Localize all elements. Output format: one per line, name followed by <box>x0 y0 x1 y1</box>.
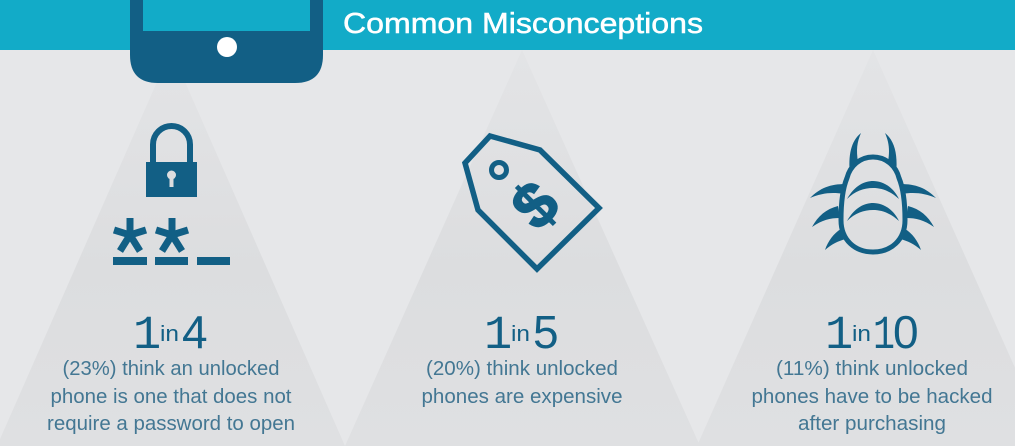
icon: bug <box>810 133 936 252</box>
text: stat 3 description: (11%) think unlocked <box>776 358 968 380</box>
stat: 1 in 4: 4 <box>182 306 208 358</box>
stat: 1 in 5 <box>484 306 559 363</box>
heading: Common Misconceptions <box>343 8 703 40</box>
stat: 1 in 10 <box>825 306 919 363</box>
text: stat 2 description: phones are expensive <box>422 386 622 408</box>
icon: price tag <box>465 136 599 269</box>
panel: light cone 1 <box>0 50 345 446</box>
stat: 1 in 10: in <box>852 321 871 346</box>
text: stat 3 description: after purchasing <box>798 413 946 435</box>
text: stat 1 description: (23%) think an unlocked <box>62 358 280 380</box>
panel: light cone 3 <box>697 50 1015 446</box>
text: stat 1 description <box>47 358 295 435</box>
stat: 1 in 10: 0 <box>893 306 919 358</box>
stat: 1 in 4: in <box>160 321 179 346</box>
icon: padlock and password <box>113 126 230 265</box>
stat: 1 in 10: 1 <box>825 310 853 363</box>
header band <box>0 0 1015 50</box>
panel: light cone 2 <box>345 50 700 446</box>
text: stat 1 description: phone is one that does not <box>50 386 292 408</box>
stat: 1 in 5: 5 <box>533 306 559 358</box>
text: stat 2 description: (20%) think unlocked <box>426 358 618 380</box>
stat: 1 in 4: 1 <box>133 310 161 363</box>
icon: price tag: $ <box>497 167 573 243</box>
text: stat 2 description <box>422 358 622 408</box>
text: stat 3 description <box>752 358 992 435</box>
icon: phone <box>130 0 323 83</box>
stat: 1 in 4 <box>133 306 208 363</box>
stat: 1 in 5: in <box>511 321 530 346</box>
text: stat 1 description: require a password to open <box>47 413 295 435</box>
text: stat 3 description: phones have to be hacked <box>752 386 992 408</box>
stat: 1 in 5: 1 <box>484 310 512 363</box>
stat: 1 in 10: 1 <box>873 310 895 363</box>
